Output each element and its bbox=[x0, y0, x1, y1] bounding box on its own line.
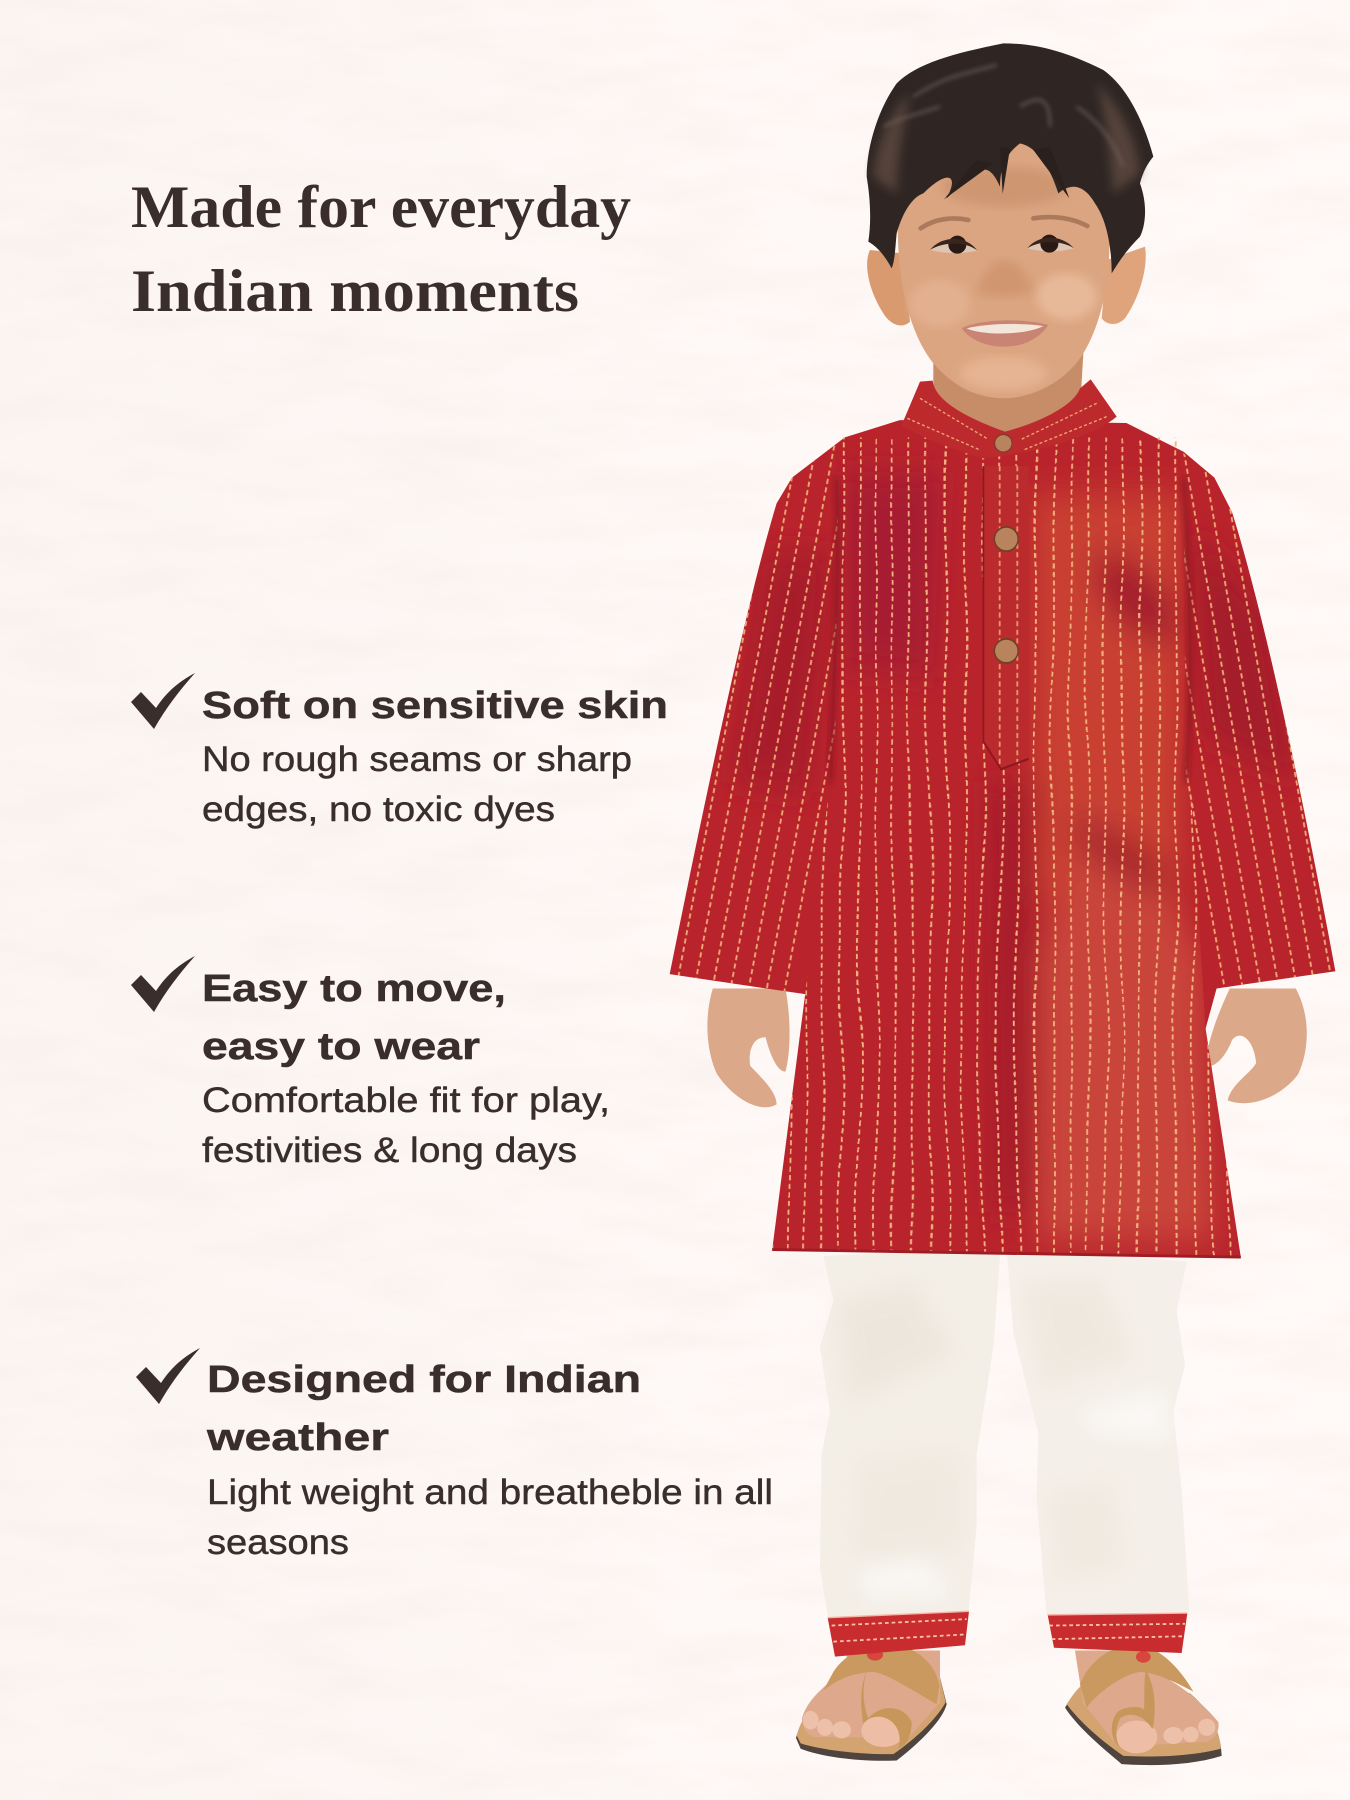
title bbox=[131, 174, 631, 324]
hem edge bbox=[772, 1250, 1241, 1257]
hands bbox=[707, 988, 1307, 1107]
nose bbox=[977, 260, 1033, 297]
icon: check mark bbox=[136, 1348, 200, 1404]
feature: designed for Indian weather bbox=[136, 1348, 773, 1562]
smile bbox=[962, 320, 1048, 347]
kurta fabric shading bbox=[845, 472, 1214, 1241]
heading: easy to move, easy to wear: Easy to move, bbox=[202, 968, 506, 1010]
illustration: boy in red kurta bbox=[670, 43, 1336, 1766]
heading: designed for Indian weather: Designed for Indian bbox=[207, 1359, 641, 1401]
head bbox=[867, 43, 1153, 458]
title: Indian moments bbox=[131, 258, 579, 324]
hair highlights and strands bbox=[873, 65, 1140, 199]
kurta base shape bbox=[670, 420, 1335, 1257]
feature: easy to move bbox=[131, 956, 610, 1170]
text: soft on sensitive skin detail: No rough seams or sharp bbox=[202, 740, 632, 779]
heading: easy to move, easy to wear: easy to wear bbox=[202, 1026, 480, 1068]
placket bbox=[983, 466, 1029, 769]
white pajama left leg bbox=[820, 1247, 1001, 1618]
text: soft on sensitive skin detail bbox=[202, 740, 632, 829]
left sandal and foot bbox=[796, 1644, 947, 1761]
text: easy to move detail: festivities & long days bbox=[202, 1131, 577, 1170]
hair bbox=[867, 43, 1153, 273]
text: designed for Indian weather detail: Light weight and breatheble in all bbox=[207, 1473, 773, 1512]
collar bbox=[902, 379, 1117, 458]
heading: soft on sensitive skin: Soft on sensitive skin bbox=[202, 685, 668, 727]
text: designed for Indian weather detail: seasons bbox=[207, 1523, 349, 1562]
armhole seams and shadows bbox=[831, 478, 1190, 782]
buttons bbox=[994, 527, 1018, 663]
heading: designed for Indian weather: weather bbox=[206, 1417, 389, 1459]
white pajama right leg bbox=[1007, 1247, 1189, 1615]
eyebrows bbox=[921, 217, 1087, 228]
legs and sandals bbox=[796, 1247, 1222, 1765]
left cuff bbox=[828, 1611, 969, 1657]
icon: check mark bbox=[131, 956, 195, 1012]
right cuff bbox=[1048, 1613, 1187, 1653]
neck bbox=[933, 353, 1083, 440]
text: easy to move detail: Comfortable fit for play, bbox=[202, 1081, 610, 1120]
pajama fold shading bbox=[837, 1276, 1170, 1597]
heading: easy to move, easy to wear bbox=[202, 968, 506, 1068]
right sandal and foot bbox=[1065, 1644, 1222, 1765]
icon: check mark bbox=[131, 673, 195, 729]
face bbox=[898, 129, 1110, 398]
kurta kantha stitching bbox=[678, 437, 1331, 1256]
eyes bbox=[930, 235, 1074, 254]
title: Made for everyday bbox=[131, 174, 631, 240]
feature: soft on sensitive skin bbox=[131, 673, 668, 829]
heading: designed for Indian weather bbox=[206, 1359, 641, 1459]
ears bbox=[867, 247, 1146, 325]
kurta bbox=[670, 420, 1336, 1258]
text: soft on sensitive skin detail: edges, no toxic dyes bbox=[202, 790, 555, 829]
text: designed for Indian weather detail bbox=[207, 1473, 773, 1562]
text: easy to move detail bbox=[202, 1081, 610, 1170]
